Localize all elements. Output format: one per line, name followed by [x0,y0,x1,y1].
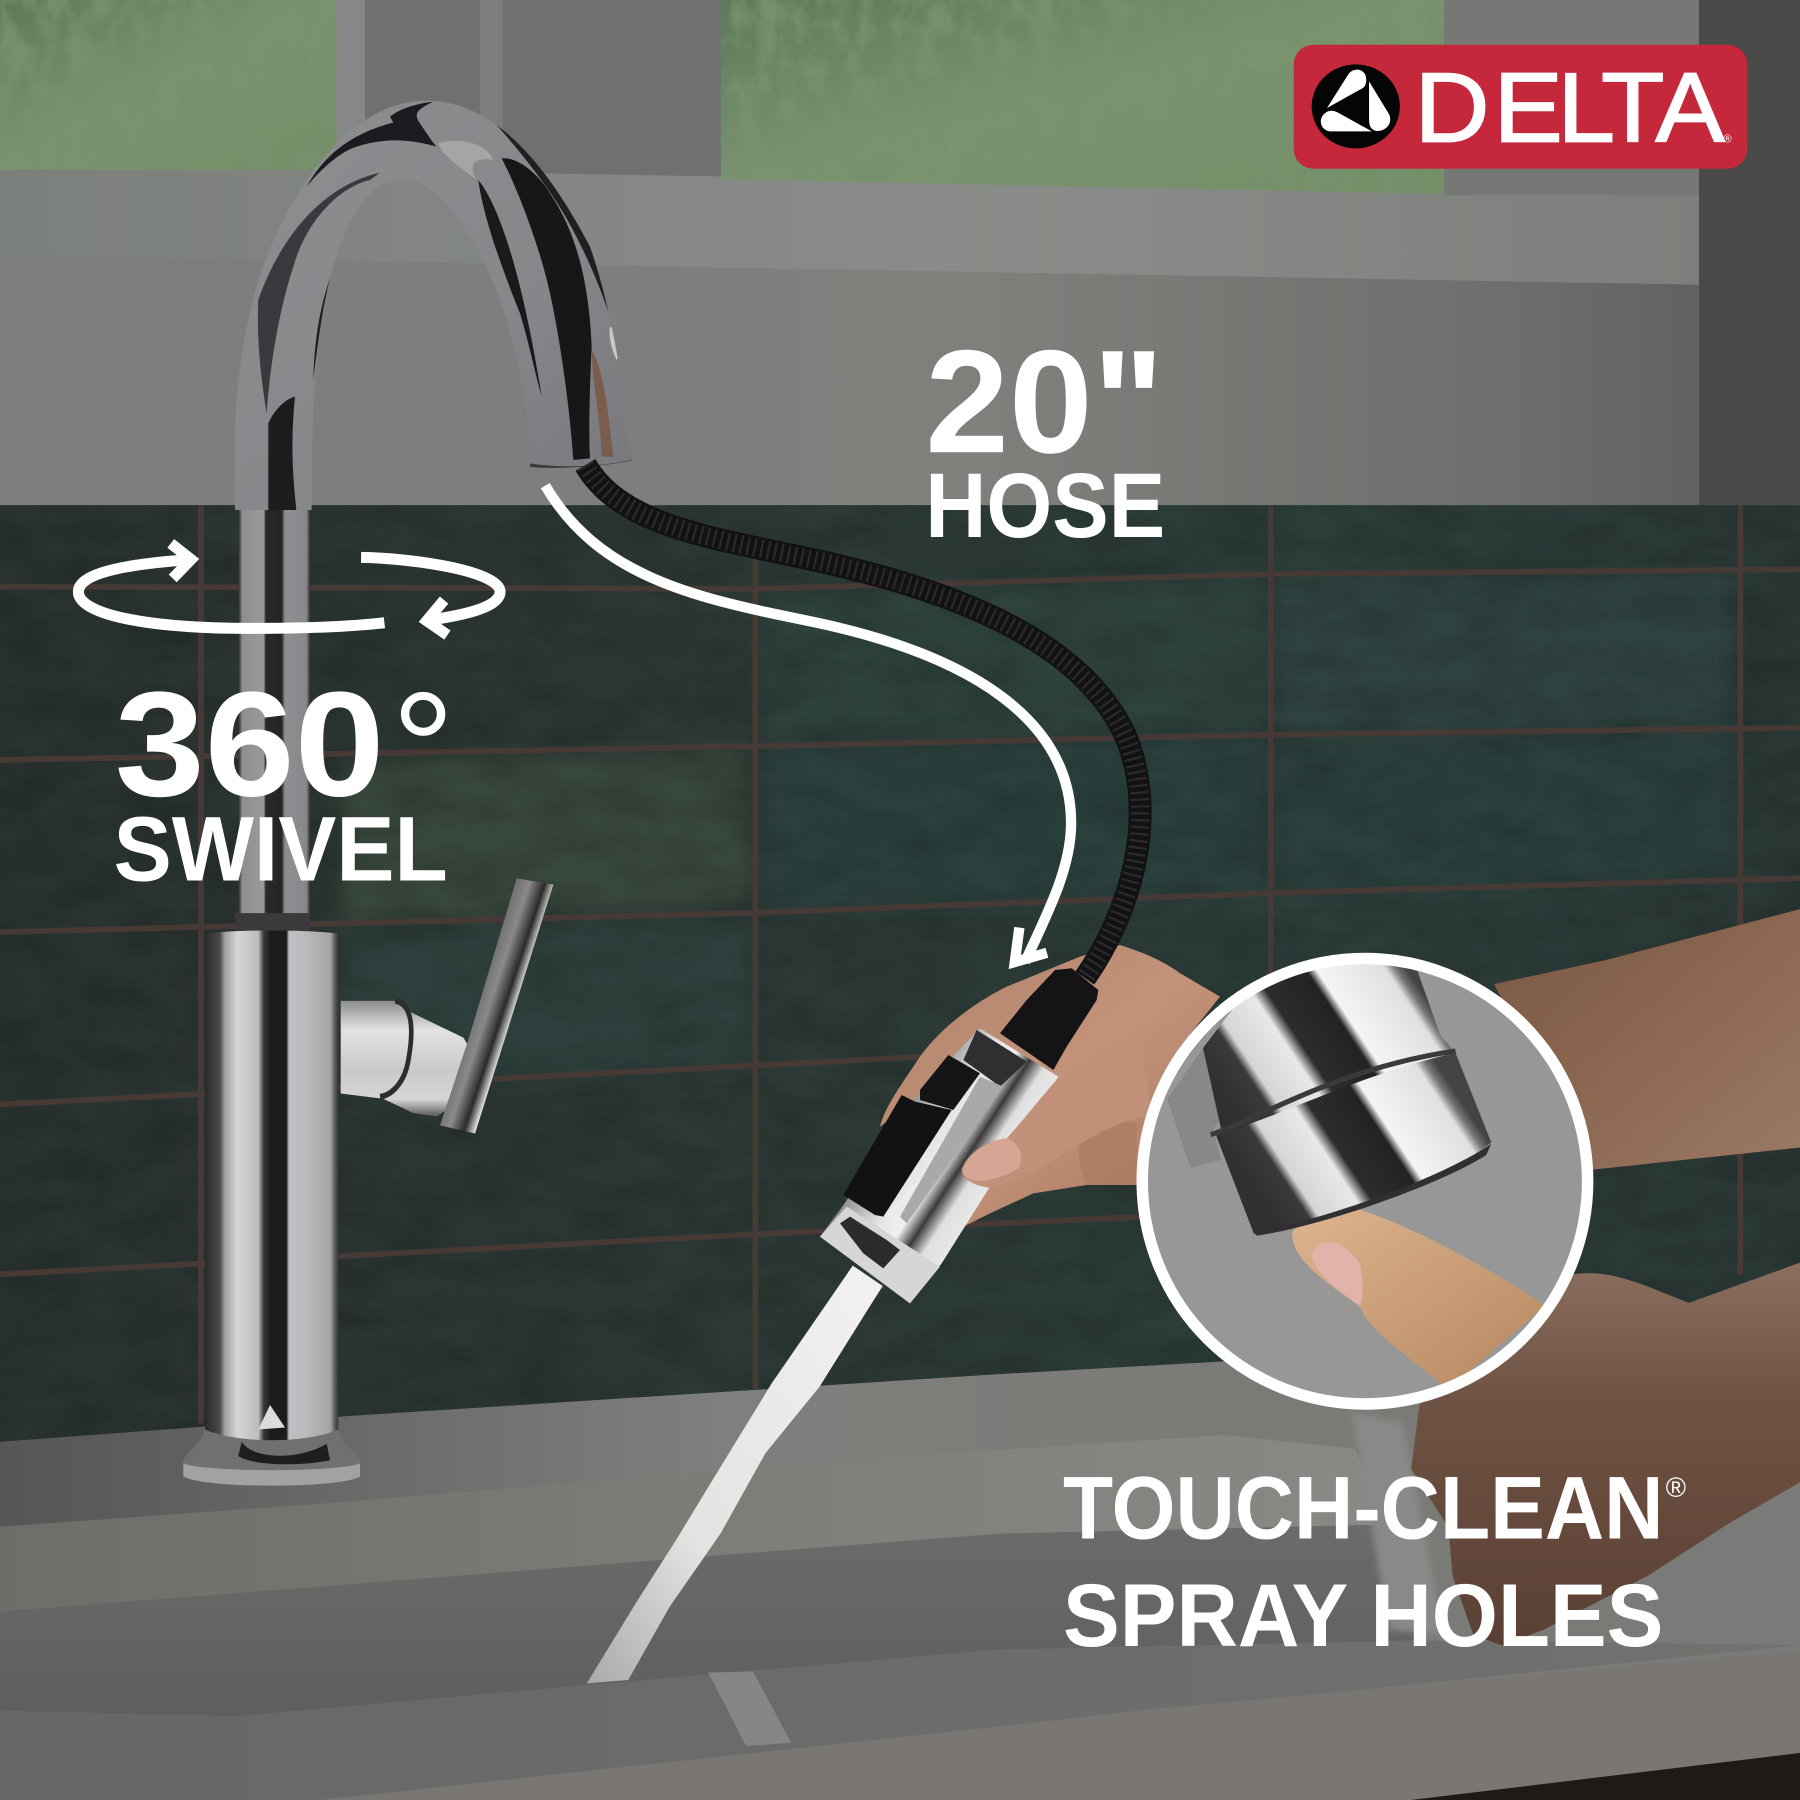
handle lever [440,878,553,1134]
handle hub [341,1001,482,1116]
touch-clean label: TOUCH-CLEAN [1063,1457,1663,1557]
sprayer end ring [820,1207,940,1303]
faucet column, base and handle [183,878,553,1486]
handle collar ring [380,1001,411,1097]
spray holes label: SPRAY HOLES [1063,1565,1663,1665]
index finger over sprayer [962,1030,1153,1188]
Delta logo badge [1294,45,1747,169]
inset circle: touch-clean close-up [1140,956,1590,1406]
hose arrow [545,486,1071,962]
sprayer lower button [843,1095,952,1217]
black braided hose [585,465,1140,978]
fingernail [963,1138,1021,1181]
sprayer top reflection [963,1030,1027,1087]
hose label: HOSE [925,455,1165,557]
arm and lower hand [1411,909,1800,1646]
360 degree heading: ° [391,659,455,836]
360 degree heading: 360 [115,661,385,828]
lower hand [1411,1263,1800,1646]
close-up nozzle lower cylinder [1216,1053,1491,1234]
20 inch heading: 20" [925,320,1164,484]
360 swivel arrows [78,543,500,635]
logo mark [1312,64,1400,148]
sprayer upper button [920,1055,980,1110]
hose connector [1000,968,1098,1070]
nozzle groove [1211,1051,1456,1135]
faucet neck [239,505,310,936]
registered mark: ® [1723,134,1732,145]
close-up fingernail [1311,1242,1363,1306]
countertop and sink [0,1355,1800,1800]
sprayer body [820,1028,1058,1303]
red badge [1294,45,1747,169]
background: window and wall [0,0,1800,528]
tile backsplash [0,505,1800,1442]
chrome channel [883,1150,948,1220]
swivel label: SWIVEL [114,798,448,900]
neck collar [235,913,310,933]
pull-down sprayer in hand [820,945,1220,1303]
hand holding sprayer [880,945,1220,1227]
nozzle bottom rim [1254,1144,1491,1236]
palm shadow [1079,1122,1137,1185]
touch-clean label: ® [1666,1472,1686,1503]
faucet body column [205,930,338,1440]
wordmark: DELTA [1415,53,1725,163]
column highlight [258,1405,285,1430]
forearm [1494,909,1800,1170]
gooseneck spout [235,101,632,513]
faucet [183,101,632,1486]
close-up finger [1292,1209,1545,1390]
close-up nozzle upper cylinder [1203,956,1456,1140]
water stream [587,1266,883,1683]
faucet base [183,1425,360,1486]
360 degree heading [115,659,455,836]
close-up nozzle bracket [1168,1048,1221,1168]
